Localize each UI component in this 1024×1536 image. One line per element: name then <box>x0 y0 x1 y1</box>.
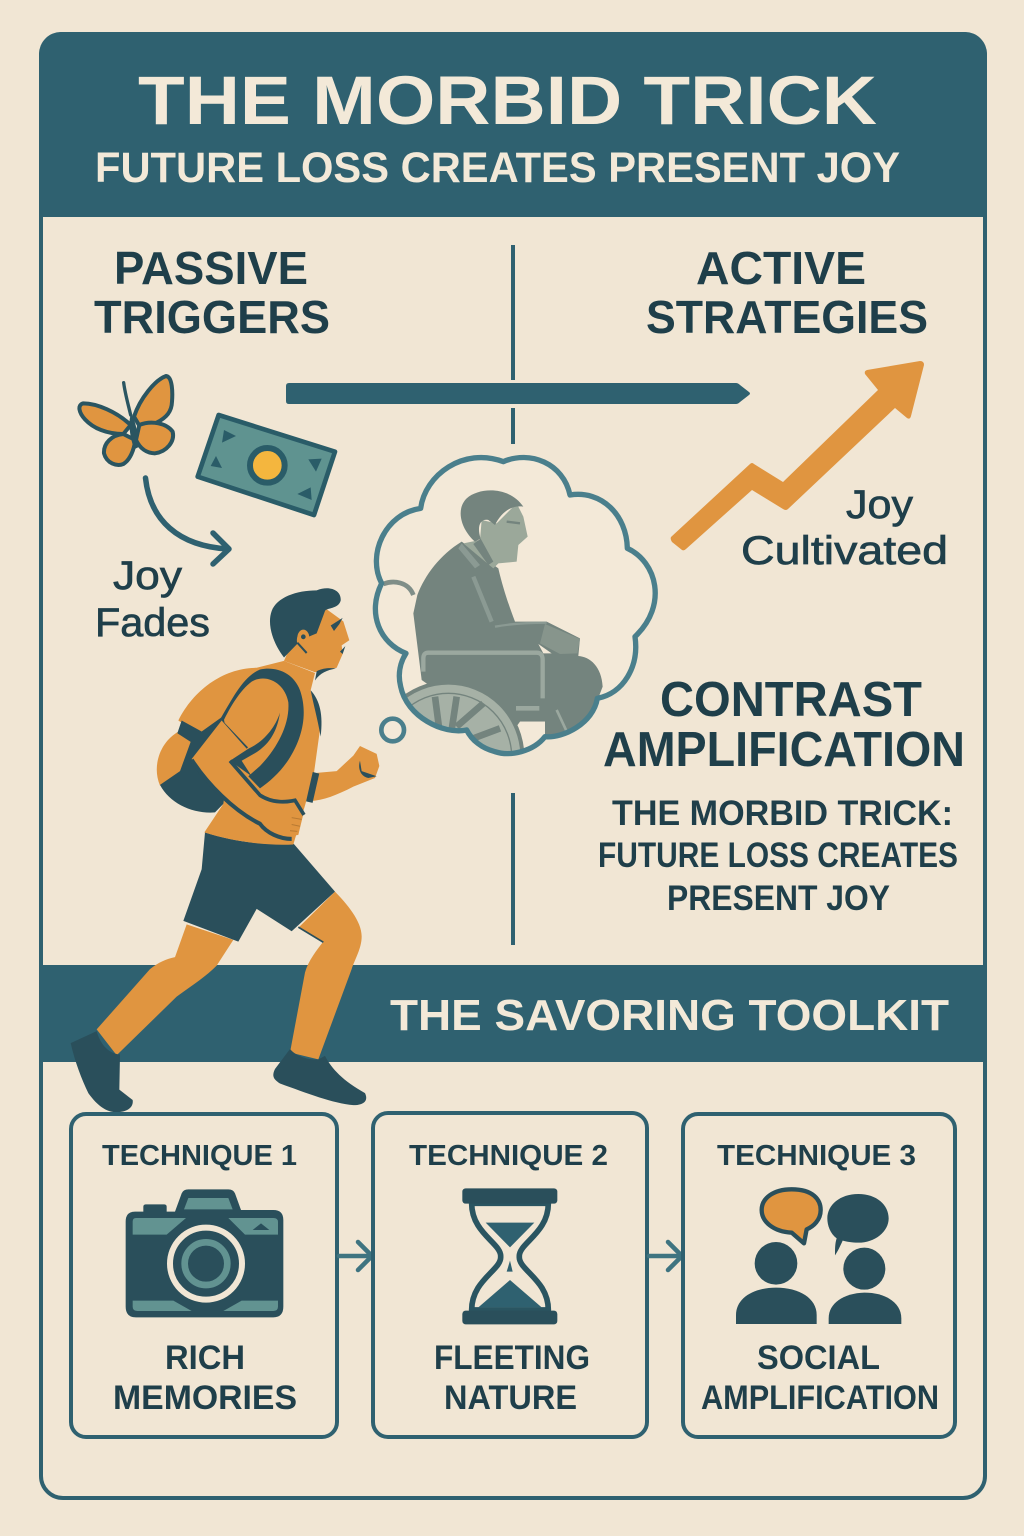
panel: technique 3: AMPLIFICATION <box>701 1379 939 1417</box>
label: joy fades: Fades <box>95 601 210 645</box>
heading: active strategies: ACTIVE <box>696 242 866 294</box>
pack lower body <box>160 716 230 813</box>
pack side lobe <box>157 732 200 786</box>
thought bubble with wheelchair figure <box>372 454 658 756</box>
horizontal spectrum bar <box>286 383 750 404</box>
arrow: technique 2 to 3 <box>649 1242 682 1270</box>
heading: contrast amplification: CONTRAST <box>660 673 922 727</box>
title: THE MORBID TRICK <box>138 62 877 139</box>
panel: technique 1: RICH <box>165 1339 245 1377</box>
panel: technique 1: TECHNIQUE 1 <box>102 1140 297 1172</box>
forearm and fist <box>310 746 379 801</box>
panel: technique 1: MEMORIES <box>113 1379 297 1417</box>
panel: technique 3 <box>683 1114 955 1437</box>
icon: money bill <box>198 415 335 515</box>
shoulder strap <box>220 669 304 788</box>
icon: hourglass <box>462 1188 557 1324</box>
text block: morbid trick summary: THE MORBID TRICK: <box>612 794 953 833</box>
label: joy fades <box>95 554 210 645</box>
arrow: joy fades <box>146 478 229 564</box>
label: joy cultivated: Cultivated <box>741 529 948 573</box>
text block: morbid trick summary: FUTURE LOSS CREATES <box>598 836 958 875</box>
rear arm <box>192 720 303 837</box>
icon: camera <box>126 1189 283 1317</box>
band: the savoring toolkit: THE SAVORING TOOLKIT <box>390 991 949 1040</box>
icon: butterfly <box>79 376 173 465</box>
arm crease <box>230 713 280 776</box>
figure head <box>461 490 528 568</box>
panel: technique 2: FLEETING <box>434 1339 590 1377</box>
center divider <box>511 245 515 945</box>
heading: passive triggers: PASSIVE <box>114 242 308 294</box>
torso and upper pack <box>178 661 321 845</box>
head <box>284 609 349 672</box>
text block: morbid trick summary <box>598 794 958 918</box>
heading: contrast amplification <box>603 673 965 777</box>
panel: technique 2: TECHNIQUE 2 <box>409 1140 608 1172</box>
shorts <box>183 832 335 942</box>
label: joy cultivated: Joy <box>846 483 913 527</box>
chest strap <box>311 690 322 737</box>
panel: technique 3: SOCIAL <box>757 1339 880 1377</box>
heading: passive triggers <box>94 242 330 343</box>
arrow: joy cultivated <box>671 361 924 550</box>
front leg <box>290 892 362 1059</box>
panel: technique 2 <box>373 1113 647 1437</box>
header banner <box>39 32 987 217</box>
band: the savoring toolkit <box>39 965 987 1062</box>
wheelchair figure <box>384 542 603 751</box>
label: joy fades: Joy <box>113 554 182 598</box>
illustration: running man <box>71 588 379 1112</box>
label: joy cultivated <box>741 483 948 573</box>
heading: active strategies <box>646 242 928 343</box>
heading: passive triggers: TRIGGERS <box>94 291 330 343</box>
panel: technique 1 <box>71 1114 337 1437</box>
heading: contrast amplification: AMPLIFICATION <box>603 723 965 777</box>
panel: technique 3: TECHNIQUE 3 <box>717 1140 916 1172</box>
heading: active strategies: STRATEGIES <box>646 291 928 343</box>
arrow: technique 1 to 2 <box>339 1242 372 1270</box>
icon: two people talking <box>736 1189 901 1324</box>
back shoe <box>71 1031 133 1112</box>
text block: morbid trick summary: PRESENT JOY <box>667 879 890 918</box>
front shoe <box>273 1049 366 1105</box>
panel: technique 2: NATURE <box>444 1379 577 1417</box>
back leg <box>97 924 233 1055</box>
subtitle: FUTURE LOSS CREATES PRESENT JOY <box>95 144 900 192</box>
small thought circle <box>381 719 404 741</box>
